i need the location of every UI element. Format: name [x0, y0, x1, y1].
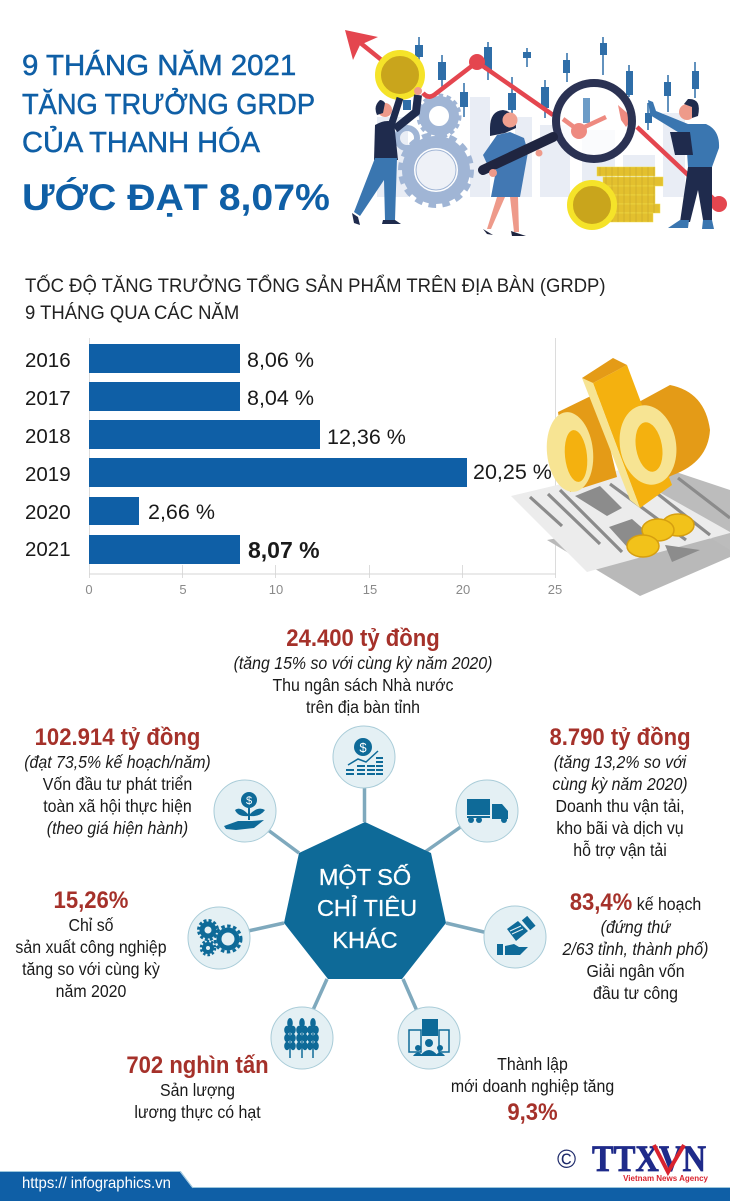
stat: new enterprises: 9,3% — [507, 1099, 558, 1126]
stat: state budget revenue: (tăng 15% so với cùng kỳ năm 2020) — [234, 653, 492, 673]
stat: state budget revenue: Thu ngân sách Nhà nước — [272, 675, 454, 695]
icon: gears and wrench — [198, 920, 241, 955]
stat: social investment: (theo giá hiện hành) — [47, 818, 188, 838]
bar chart: 8,07 % — [248, 537, 320, 563]
bar chart — [25, 338, 562, 597]
stat: grain output: 702 nghìn tấn — [126, 1052, 269, 1079]
title: ƯỚC ĐẠT 8,07% — [22, 177, 330, 218]
central heptagon — [284, 822, 446, 979]
stat: transport revenue: Doanh thu vận tải, — [555, 796, 685, 816]
stat: state budget revenue — [234, 625, 492, 717]
stat: transport revenue: (tăng 13,2% so với — [554, 752, 686, 772]
illustration: percent sign on newspapers — [511, 358, 730, 596]
stat: transport revenue: 8.790 tỷ đồng — [549, 724, 691, 751]
icon: truck — [467, 799, 508, 823]
stat: industrial production: tăng so với cùng kỳ — [22, 959, 160, 979]
stat: industrial production: năm 2020 — [56, 981, 126, 1001]
stat: social investment: 102.914 tỷ đồng — [35, 724, 200, 751]
bar chart: 2020 — [25, 501, 71, 524]
gears — [397, 96, 471, 205]
stat: new enterprises: Thành lập — [497, 1054, 568, 1074]
stat: grain output — [126, 1052, 269, 1122]
stat: public investment disbursement: 2/63 tỉnh, thành phố) — [563, 939, 708, 959]
title: 9 THÁNG NĂM 2021 — [22, 50, 296, 82]
chart heading: TỐC ĐỘ TĂNG TRƯỞNG TỔNG SẢN PHẨM TRÊN ĐỊA BÀN (GRDP) — [25, 275, 606, 297]
man with clipboard — [648, 99, 719, 229]
stat: new enterprises — [451, 1054, 614, 1126]
bar chart: 2,66 % — [148, 500, 215, 524]
coins — [378, 53, 422, 97]
bar chart: 15 — [363, 582, 377, 597]
woman with magnifier — [483, 110, 553, 236]
central heptagon: KHÁC — [332, 927, 398, 953]
copyright and TTXVN logo: TTXVN — [592, 1139, 706, 1180]
bar chart: 2018 — [25, 425, 71, 448]
bar chart: 10 — [269, 582, 283, 597]
footer bar — [0, 1187, 730, 1201]
stat: new enterprises: mới doanh nghiệp tăng — [451, 1076, 614, 1096]
stat: public investment disbursement: (đứng thứ — [601, 917, 670, 937]
stat: public investment disbursement: Giải ngân vốn — [586, 961, 685, 981]
copyright and TTXVN logo: Vietnam News Agency — [623, 1174, 708, 1183]
stat: transport revenue — [549, 724, 691, 860]
stat: transport revenue: kho bãi và dịch vụ — [556, 818, 684, 838]
left ring — [543, 410, 597, 494]
stat: industrial production: 15,26% — [54, 887, 128, 914]
footer url tab: https:// infographics.vn — [22, 1175, 171, 1192]
title: TĂNG TRƯỞNG GRDP — [22, 89, 315, 121]
stat: transport revenue: cùng kỳ năm 2020) — [552, 774, 688, 794]
bar chart: 25 — [548, 582, 562, 597]
magnifier lens — [556, 83, 633, 159]
bar chart: 20 — [456, 582, 470, 597]
icon: hand with handshake — [497, 916, 536, 955]
copyright and TTXVN logo: © — [557, 1144, 576, 1174]
icon: hand with plant — [224, 792, 265, 830]
stat: transport revenue: hỗ trợ vận tải — [573, 840, 667, 860]
bar chart: 8,04 % — [247, 386, 314, 410]
bar chart: 20,25 % — [473, 460, 552, 484]
red trend line — [353, 37, 720, 205]
stat: social investment: toàn xã hội thực hiện — [43, 796, 192, 816]
stat: public investment disbursement: đầu tư công — [593, 983, 678, 1003]
bar chart: 2016 — [25, 349, 71, 372]
bar chart: 8,06 % — [247, 348, 314, 372]
stat: public investment disbursement: 83,4% kế hoạch — [570, 889, 701, 916]
stat: industrial production: Chỉ số — [68, 915, 114, 935]
title — [22, 50, 330, 218]
bar chart: 2021 — [25, 538, 71, 561]
stat: social investment: (đạt 73,5% kế hoạch/năm) — [24, 752, 211, 772]
chart heading: 9 THÁNG QUA CÁC NĂM — [25, 302, 239, 324]
stat: industrial production — [15, 887, 167, 1001]
stat: grain output: Sản lượng — [160, 1080, 235, 1100]
man with coin — [352, 87, 422, 225]
slash — [593, 365, 672, 508]
title: CỦA THANH HÓA — [22, 127, 260, 159]
stat: social investment: Vốn đầu tư phát triển — [43, 774, 192, 794]
right ring — [613, 401, 683, 489]
back cylinders — [558, 393, 617, 492]
central heptagon: CHỈ TIÊU — [317, 893, 417, 921]
stat: industrial production: sản xuất công nghiệp — [15, 937, 167, 957]
chart heading — [25, 274, 606, 324]
stat: public investment disbursement — [562, 889, 708, 1003]
stat: social investment — [24, 724, 211, 838]
bar chart: 0 — [85, 582, 93, 597]
stat: state budget revenue: 24.400 tỷ đồng — [286, 625, 440, 652]
illustration: people analysing chart — [345, 30, 727, 236]
bar chart: 12,36 % — [327, 425, 406, 449]
bar chart: 2019 — [25, 463, 71, 486]
footer url tab — [0, 1171, 193, 1192]
central heptagon: MỘT SỐ — [319, 863, 411, 890]
gold coins — [662, 514, 694, 536]
icon: wheat — [284, 1018, 319, 1058]
icon: money growth: $ — [359, 740, 367, 755]
icon: office and people — [409, 1019, 449, 1056]
stat: grain output: lương thực có hạt — [134, 1102, 261, 1122]
bar chart: 2017 — [25, 387, 71, 410]
icon: money growth — [346, 738, 383, 775]
bar chart: 5 — [179, 582, 187, 597]
icon: hand with plant: $ — [246, 795, 252, 807]
stat: state budget revenue: trên địa bàn tỉnh — [306, 697, 420, 717]
